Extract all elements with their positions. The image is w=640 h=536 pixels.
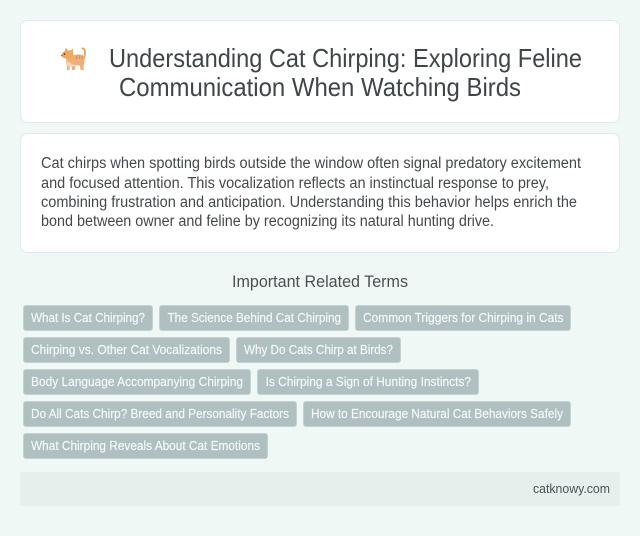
tag xyxy=(236,338,400,362)
tag xyxy=(160,306,348,330)
tag: Body Language Accompanying Chirping xyxy=(31,375,243,389)
panel: description xyxy=(20,134,620,252)
heading: related terms: Important Related Terms xyxy=(232,273,408,291)
tag xyxy=(24,370,250,394)
footer xyxy=(20,472,620,506)
footer source: catknowy.com xyxy=(533,481,610,496)
description text: combining frustration and anticipation. Understanding this behavior helps enrich the xyxy=(41,194,577,211)
description text xyxy=(41,155,582,230)
tag: What Is Cat Chirping? xyxy=(31,311,145,325)
tag xyxy=(24,306,152,330)
tag xyxy=(24,402,296,426)
description text: bond between owner and feline by recognizing its natural hunting drive. xyxy=(41,213,494,230)
title text: Communication When Watching Birds xyxy=(119,72,521,102)
tag: What Chirping Reveals About Cat Emotions xyxy=(31,439,260,453)
tag: How to Encourage Natural Cat Behaviors Safely xyxy=(311,407,564,421)
tag: Chirping vs. Other Cat Vocalizations xyxy=(31,343,222,357)
panel: related term tags xyxy=(24,306,570,458)
tag xyxy=(304,402,570,426)
description text: Cat chirps when spotting birds outside the window often signal predatory excitement xyxy=(41,155,582,172)
tag xyxy=(258,370,478,394)
tag xyxy=(356,306,570,330)
title text: Understanding Cat Chirping: Exploring Feline xyxy=(109,43,582,73)
panel: title xyxy=(20,20,620,122)
tag: Common Triggers for Chirping in Cats xyxy=(363,311,564,325)
tag: The Science Behind Cat Chirping xyxy=(168,311,341,325)
icon: cat xyxy=(61,47,86,70)
tag: Is Chirping a Sign of Hunting Instincts? xyxy=(266,375,471,389)
title text xyxy=(109,43,582,102)
tag xyxy=(24,338,230,362)
tag: Do All Cats Chirp? Breed and Personality Factors xyxy=(31,407,289,421)
tag: Why Do Cats Chirp at Birds? xyxy=(244,343,393,357)
tag xyxy=(24,434,268,458)
description text: and focused attention. This vocalization reflects an instinctual response to prey, xyxy=(41,175,549,192)
